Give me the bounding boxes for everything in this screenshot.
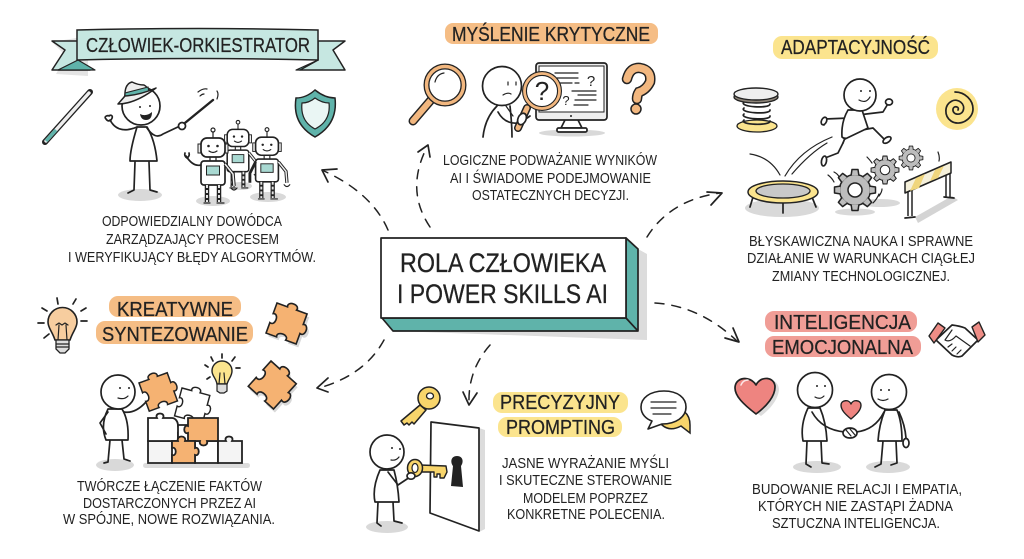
description: ODPOWIEDZIALNY DOWÓDCA (102, 213, 282, 230)
panel: Kreatywne Syntezowanie (38, 296, 316, 528)
description: MODELEM POPRZEZ (523, 491, 648, 507)
box shadow (395, 249, 647, 340)
description: KTÓRYCH NIE ZASTĄPI ŻADNA (758, 497, 953, 515)
robot: right (250, 128, 290, 199)
figure: thinker (482, 66, 530, 137)
description: I WERYFIKUJĄCY BŁĘDY ALGORYTMÓW. (68, 249, 316, 266)
icon: door (430, 422, 485, 532)
icon: gears (828, 146, 939, 216)
heading pills: PRECYZYJNY (500, 391, 620, 414)
handshake of figures (843, 428, 857, 438)
icon: magnifier in hand: ? (535, 76, 549, 106)
icon: small yellow bulb (205, 354, 240, 393)
panel: Precyzyjny Prompting (366, 387, 690, 533)
main title: ROLA CZŁOWIEKA (400, 248, 606, 278)
icon: small heart (841, 401, 861, 419)
key in hand (407, 460, 447, 479)
gear large (834, 170, 876, 210)
arrow to Myślenie Krytyczne (417, 145, 430, 227)
heading pill: ADAPTACYJNOŚĆ (781, 35, 930, 59)
arrow to Człowiek-Orkiestrator (322, 169, 388, 230)
description: ZARZĄDZAJĄCY PROCESEM (106, 232, 279, 248)
description: ZMIANY TECHNOLOGICZNEJ. (772, 269, 950, 285)
gear medium (871, 156, 899, 184)
icon: large heart (735, 378, 779, 416)
robot: rear (224, 120, 260, 188)
figure: person with key (366, 435, 410, 533)
heading pills (96, 296, 253, 346)
icon: spiral (936, 88, 978, 130)
description: I SKUTECZNE STEROWANIE (499, 473, 672, 489)
baton in hand (180, 100, 213, 127)
heading pills: KREATYWNE (117, 298, 233, 321)
icon: puzzle top right (265, 298, 316, 349)
heading pills: EMOCJONALNA (772, 336, 913, 359)
description (68, 213, 316, 266)
central box (381, 238, 647, 340)
panel: Adaptacyjność (734, 35, 978, 285)
description: TWÓRCZE ŁĄCZENIE FAKTÓW (77, 478, 262, 495)
description: SZTUCZNA INTELIGENCJA. (772, 516, 940, 532)
ribbon heading: CZŁOWIEK-ORKIESTRATOR (86, 34, 310, 57)
description (443, 151, 657, 204)
icon: baton (45, 92, 90, 142)
icon: orange bulb (38, 298, 87, 353)
box front (381, 238, 626, 318)
ribbon heading (52, 28, 345, 76)
icon: monitor: ? (562, 93, 570, 108)
dashed arrows from the centre (317, 145, 739, 405)
icon: magnifier (413, 66, 464, 121)
figure: jumping person (820, 79, 892, 166)
description (499, 454, 672, 523)
description: JASNE WYRAŻANIE MYŚLI (502, 454, 669, 472)
main title (397, 248, 608, 309)
robot: left (185, 128, 237, 203)
icon: question mark (627, 68, 650, 114)
icon: key (401, 387, 440, 425)
heading pill: MYŚLENIE KRYTYCZNE (452, 22, 650, 46)
icon: spring (734, 88, 778, 132)
icon: barrier (905, 162, 958, 223)
description: AI I ŚWIADOME PODEJMOWANIE (450, 169, 651, 187)
figure: left person (793, 372, 845, 473)
description: DZIAŁANIE W WARUNKACH CIĄGŁEJ (747, 251, 975, 267)
main title: I POWER SKILLS AI (397, 279, 608, 309)
arrow to Kreatywne Syntezowanie (317, 340, 384, 392)
description: BŁYSKAWICZNA NAUKA I SPRAWNE (749, 234, 973, 250)
icon: monitor (536, 63, 607, 136)
description: LOGICZNE PODWAŻANIE WYNIKÓW (443, 151, 657, 169)
description: OSTATECZNYCH DECYZJI. (472, 188, 629, 204)
icon: magnifier in hand (516, 74, 560, 128)
description (747, 234, 975, 285)
heading pills (765, 311, 921, 359)
figure: puzzle builder (96, 375, 146, 471)
icon: monitor: ? (587, 73, 595, 90)
heading pills (493, 391, 628, 439)
description: DOSTARCZONYCH PRZEZ AI (83, 496, 256, 512)
heading pills: PROMPTING (506, 416, 615, 439)
icon: speech bubbles (641, 391, 690, 433)
description (63, 478, 275, 528)
icon: puzzle right (247, 357, 306, 416)
puzzle held (137, 367, 182, 411)
icon: trampoline (745, 137, 832, 217)
description: BUDOWANIE RELACJI I EMPATIA, (752, 482, 962, 498)
hat (125, 82, 149, 98)
heading pills: SYNTEZOWANIE (102, 323, 248, 346)
arrow to Inteligencja Emocjonalna (655, 303, 739, 342)
figure: right person (856, 374, 910, 473)
puzzle wall (143, 414, 250, 468)
description (752, 482, 962, 532)
description: W SPÓJNE, NOWE ROZWIĄZANIA. (63, 511, 275, 528)
heading pills: INTELIGENCJA (774, 311, 911, 334)
box right and bottom faces (382, 238, 638, 331)
figure: conductor (105, 82, 218, 201)
panel: Inteligencja Emocjonalna (735, 311, 985, 532)
icon: handshake (929, 322, 985, 357)
panel: Myślenie Krytyczne (413, 22, 658, 204)
arrow to Precyzyjny Prompting (463, 345, 490, 405)
gear small (899, 146, 923, 170)
arrow to Adaptacyjność (647, 192, 722, 237)
icon: shield (295, 90, 335, 137)
description: KONKRETNE POLECENIA. (507, 507, 665, 523)
puzzle falling (175, 384, 215, 424)
robots group (185, 120, 290, 206)
panel: Człowiek-Orkiestrator (45, 28, 345, 266)
